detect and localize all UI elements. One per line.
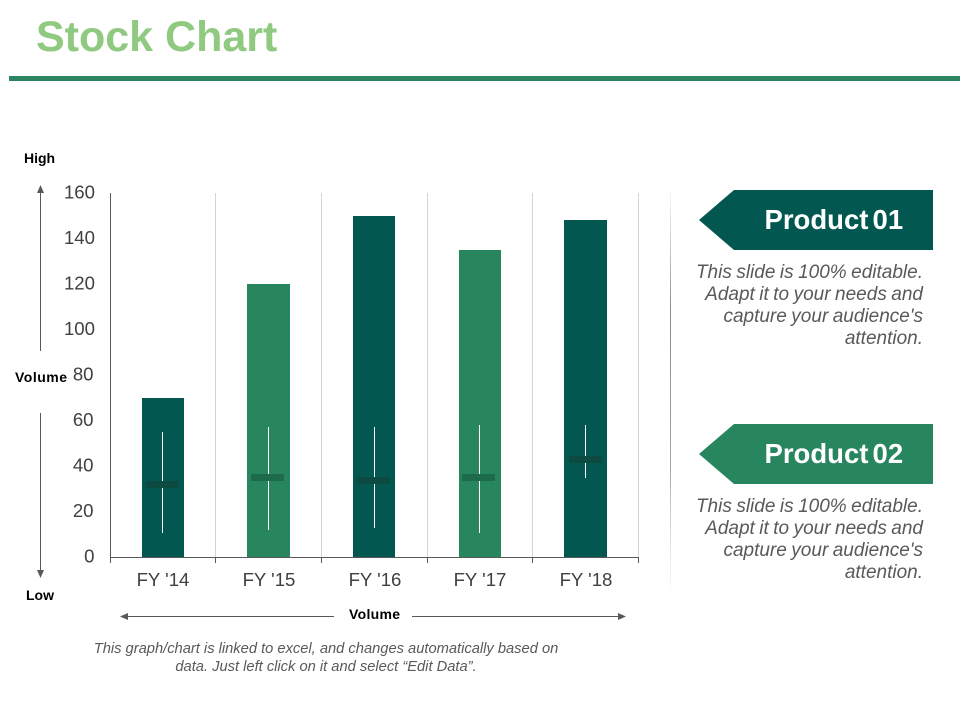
product 01 description: Adapt it to your needs and: [704, 284, 924, 305]
y axis labels: 100: [64, 318, 95, 339]
x axis labels: [137, 569, 612, 590]
product 02 description: attention.: [845, 562, 923, 583]
y axis labels: [64, 182, 95, 566]
chart note: [94, 641, 558, 675]
x axis labels: FY '17: [454, 569, 506, 590]
high-low whiskers: [162, 425, 586, 533]
product 02 arrow banner: Product 02: [764, 438, 903, 469]
vertical volume arrow with high and low labels: Volume: [15, 369, 67, 385]
y axis labels: 0: [84, 546, 94, 566]
product 01 description: attention.: [845, 328, 923, 349]
product 02 description: [696, 496, 924, 583]
product 02 description: capture your audience's: [723, 540, 923, 561]
panel: product 01: [696, 190, 933, 349]
y axis labels: 40: [73, 454, 94, 476]
x axis labels: FY '15: [243, 569, 295, 590]
product 01 description: capture your audience's: [723, 306, 923, 327]
vertical volume arrow with high and low labels: High: [24, 150, 55, 166]
x axis labels: FY '18: [560, 569, 612, 590]
product 01 arrow banner: Product 01: [764, 204, 903, 235]
open-close ticks: [146, 456, 602, 488]
y axis labels: 20: [73, 500, 94, 521]
bars: [142, 216, 607, 557]
y axis labels: 80: [73, 364, 94, 384]
product 02 arrow banner: [699, 424, 933, 484]
vertical volume arrow with high and low labels: Low: [26, 587, 54, 603]
y axis labels: 140: [64, 227, 95, 248]
title: Stock Chart: [36, 13, 277, 61]
product 02 description: This slide is 100% editable.: [696, 496, 923, 517]
chart note: This graph/chart is linked to excel, and changes automatically based on: [94, 641, 558, 657]
horizontal volume arrow: Volume: [349, 606, 400, 622]
divider: [670, 190, 671, 590]
product 01 description: [696, 262, 924, 349]
stock chart: [64, 182, 638, 590]
y axis labels: 160: [64, 182, 95, 202]
product 01 arrow banner: [699, 190, 933, 250]
horizontal volume arrow: [120, 606, 626, 622]
y axis labels: 120: [64, 272, 95, 294]
panel: product 02: [696, 424, 933, 583]
product 02 description: Adapt it to your needs and: [704, 518, 924, 539]
y axis labels: 60: [73, 409, 94, 430]
x axis labels: FY '14: [137, 569, 189, 590]
chart note: data. Just left click on it and select “Edit Data”.: [175, 659, 477, 675]
product 01 description: This slide is 100% editable.: [696, 262, 923, 283]
axes: [110, 193, 638, 563]
vertical volume arrow with high and low labels: [15, 150, 67, 603]
x axis labels: FY '16: [349, 569, 401, 590]
